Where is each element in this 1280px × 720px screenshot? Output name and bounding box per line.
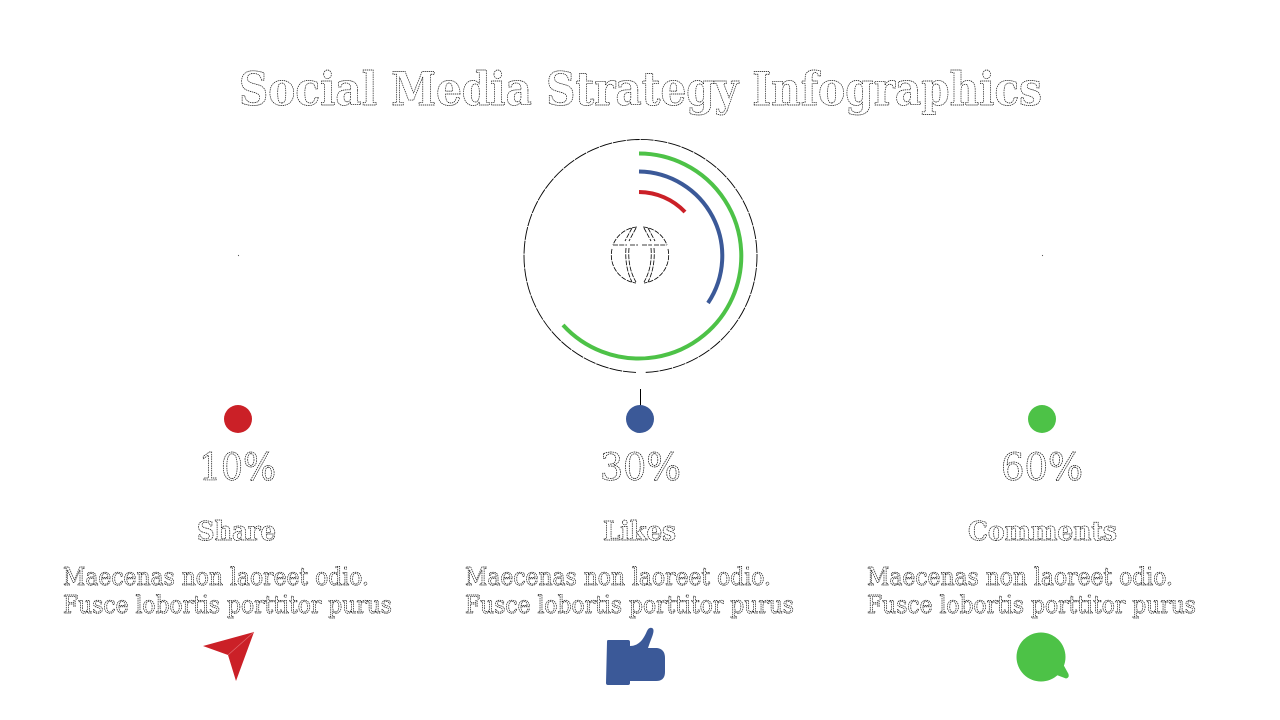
arc: likes 30% (639, 172, 722, 303)
percentage: 30%: 30% (600, 446, 681, 489)
marker dot right (1042, 255, 1043, 256)
body text: comments (867, 563, 1196, 619)
radial progress chart (524, 139, 757, 372)
arc: share 10% (639, 192, 685, 212)
body text: likes (465, 563, 794, 619)
icon: thumbs up (606, 628, 665, 685)
connector line (640, 389, 642, 406)
body text: share: Maecenas non laoreet odio. (63, 563, 369, 591)
body text: share: Fusce lobortis porttitor purus (63, 591, 392, 619)
percentage: 60%: 60% (1001, 446, 1083, 489)
arc: comments 60% (563, 154, 741, 358)
heading: Likes: Likes (603, 517, 676, 547)
icon: globe (611, 227, 669, 283)
column: share (63, 405, 392, 681)
body text: share (63, 563, 392, 619)
title: Social Media Strategy Infographics (239, 62, 1042, 116)
icon: speech bubble (1016, 632, 1069, 682)
body text: comments: Fusce lobortis porttitor purus (867, 591, 1196, 619)
icon: paper plane (203, 632, 254, 681)
column: likes (465, 405, 794, 685)
legend dot: comments (1028, 405, 1056, 433)
marker dot left (238, 255, 239, 256)
legend dot: likes (626, 405, 654, 433)
body text: likes: Fusce lobortis porttitor purus (465, 591, 794, 619)
body text: comments: Maecenas non laoreet odio. (867, 563, 1173, 591)
column: comments (867, 405, 1196, 682)
heading: Comments: Comments (968, 517, 1117, 547)
legend dot: share (224, 405, 252, 433)
body text: likes: Maecenas non laoreet odio. (465, 563, 771, 591)
outer ring (524, 139, 757, 372)
heading: Share: Share (197, 517, 276, 547)
percentage: 10%: 10% (199, 446, 276, 489)
